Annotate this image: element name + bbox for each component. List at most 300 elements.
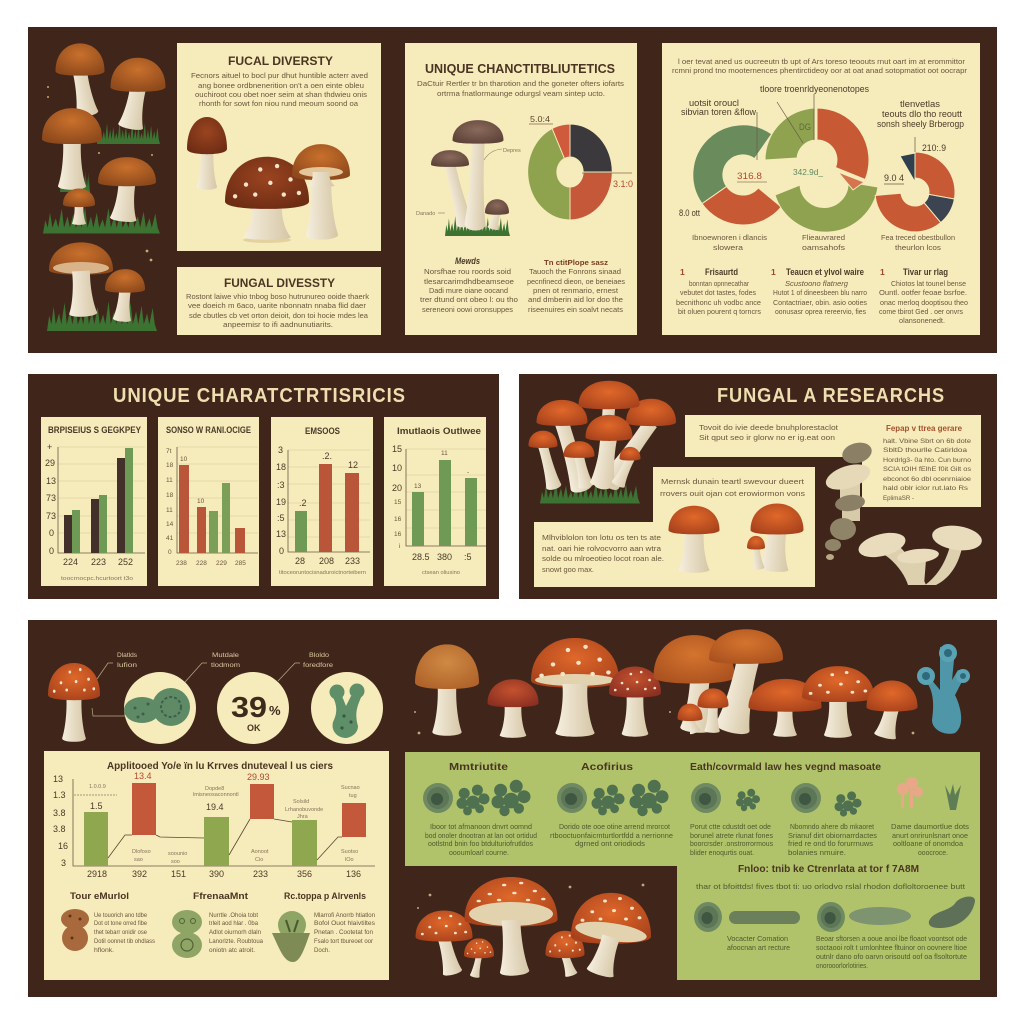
column: feature: Contactriaer, obin. asio ooties [773, 298, 867, 307]
bar chart card 2: 18 [166, 492, 174, 499]
column: frensa: Lanorlzte. Roubtoua [209, 938, 263, 945]
circle: 39% stat: % [269, 703, 281, 718]
bar chart: 19.4 [206, 802, 224, 812]
bar chart: 1.5 [90, 801, 103, 811]
bar chart card 3: EMSOOS [305, 426, 340, 436]
text block: right: SbltD thourlle Catirldoa [883, 447, 967, 454]
bar chart card 3: 0 [279, 546, 284, 556]
panel: green knowledge area [405, 752, 980, 980]
pale mushroom trio [856, 523, 983, 585]
text columns: boorcrsder .onstrorrormous [690, 839, 773, 848]
chart labels: left: sibvian toren &flow [681, 107, 756, 117]
captions: slowera [713, 243, 744, 252]
bar chart card 2: 10 [197, 498, 205, 505]
bar chart card 2: 14 [166, 521, 174, 528]
text column: left: Dadi mure oiane oocand [429, 286, 508, 295]
bar chart card 1 [41, 417, 147, 586]
bar chart: Aonoot [251, 849, 269, 855]
text columns: Dorido ote ooe otine arrend mrorcot [559, 822, 671, 831]
text columns: Porut ctte cdustdt oet ode [690, 822, 771, 831]
donut chart: left: 316.8 [737, 171, 762, 181]
text block: lower left: solde ou mlroeotieo locot roan ale. [542, 554, 664, 563]
bar chart card 3: :5 [277, 513, 285, 523]
donut chart [528, 114, 633, 220]
donut chart: 5.0:4 [530, 114, 550, 124]
bar chart: 136 [346, 869, 361, 879]
bar chart card 3: 28 [295, 556, 305, 566]
donut chart: right: 210:.9 [922, 143, 946, 153]
column: rctoppa: Doch. [314, 947, 330, 954]
bar chart: 392 [132, 869, 147, 879]
captions: Flieauvrared [802, 233, 845, 242]
text columns: fried re ond tlo forurrnuws [788, 839, 873, 848]
column: tour: Dotil oonnet tib ohdlass [94, 938, 156, 945]
text block: left caption: Vocacter Comation [727, 934, 788, 943]
circle: 39% stat: 39 [231, 692, 267, 724]
text block: vee doeich m 6aco, uarite nbonnatn nnaba flid daer [188, 301, 367, 310]
column: feature: oonusasr oprea rereervio, fies [775, 307, 866, 316]
bar chart card 4: :5 [464, 552, 472, 562]
column: tivar: Chiotos lat tounel bense [891, 279, 966, 288]
circle: branching fungus [311, 672, 383, 744]
column: rctoppa: Rc.toppa p Alrvenls [284, 891, 366, 901]
column: tivar: Tivar ur rlag [903, 267, 948, 277]
text block: sde cbutles cb vet orton deioit, don toi hocie mdes lea [189, 311, 369, 320]
column: friseurtd: vebutet dot tastes, fodes [680, 288, 756, 297]
column: rctoppa [272, 891, 376, 962]
text columns: anurt onrirunlsnart onoe [892, 831, 968, 840]
callout panel: top right [685, 415, 981, 507]
mushroom: spotted red [225, 157, 309, 243]
text columns: Srianuf dirt obiornarrdactes [788, 831, 877, 840]
captions: Ibnoewnoren i dlancis [692, 233, 767, 242]
bar chart card 3: 13 [276, 529, 286, 539]
text block: right [883, 424, 972, 502]
heading: UNIQUE CHARATCTRTISRICIS [113, 385, 406, 407]
text block: right caption: onorooorlorlotiries. [816, 961, 868, 970]
column: frensa: trleit aod hlar . 0ba [209, 920, 258, 927]
bar chart card 1: BRPISEIUS S GEGKPEY [48, 425, 141, 435]
bar chart card 4: 16 [394, 516, 402, 523]
chart labels: left: uotsit oroucl [689, 98, 739, 108]
callout labels: Danado [416, 211, 435, 217]
column: friseurtd [676, 267, 761, 316]
bar chart card 4: 11 [441, 450, 448, 457]
column: feature: Hutot 1 of dineesbeen blu narro [773, 288, 867, 297]
text block: Fecnors aituel to bocl pur dhut huntible acterr aved [191, 71, 368, 80]
bar chart card 2: 229 [216, 560, 227, 567]
bar chart: soounio [168, 851, 187, 857]
mushroom group: lower spotted [416, 877, 651, 979]
donut chart: centre [765, 94, 878, 232]
bar chart card 3: 233 [345, 556, 360, 566]
chart labels: right: tlenvetlas [900, 99, 941, 109]
bar chart card 3: 19 [276, 497, 286, 507]
bar chart card 3: 12 [348, 460, 358, 470]
mushroom: orange [292, 144, 350, 240]
bar chart: Dopde8 [205, 786, 224, 792]
panel: unique characteristics bar charts [28, 374, 499, 599]
leader labels [92, 652, 333, 716]
bar chart card 3 [271, 417, 373, 586]
bar chart card 4: 13 [414, 483, 422, 490]
panel: applied uses chart [44, 751, 389, 980]
text block: Rostont laiwe vhio tnbog boso hutrunureo ooide thaerk [186, 292, 369, 301]
column: rctoppa: Bofol Ouot hlaivtiltes [314, 920, 376, 927]
bar chart: tug [349, 793, 357, 799]
bar chart card 2: 18 [166, 462, 174, 469]
column: friseurtd: bit oluen pourent q torncrs [678, 307, 761, 316]
text block: ortrma fnatlormaunge odurgsl veam sintep ucto. [437, 89, 605, 98]
column: tivar: come tbirot Ged . oer onvrs [879, 307, 963, 316]
bar chart: Solsild [293, 799, 309, 805]
bar chart card 4: Imutlaois Outlwee [397, 426, 481, 436]
icons row [423, 777, 961, 817]
bar chart [53, 771, 375, 879]
captions: theurlon lcos [895, 243, 941, 252]
bar chart: Sucnao [341, 785, 360, 791]
text columns [425, 822, 969, 857]
bar chart: Cio [255, 857, 263, 863]
bar chart card 3: 208 [319, 556, 334, 566]
column: tour: thet tebarr onidir ose [94, 929, 147, 936]
bar chart card 1: 223 [91, 557, 106, 567]
text block: left caption [727, 934, 790, 952]
column: tivar: Ountl. ootfer feoae bsrfoe. [879, 288, 967, 297]
text block [417, 79, 624, 98]
bar chart card 3: .2. [322, 451, 332, 461]
text column: left: tlesarcarimdhdbeamseoe [424, 277, 514, 286]
mushroom cluster: mauve [431, 120, 510, 236]
column: tour: hflonk. [94, 947, 114, 954]
text columns: Nbomndo ahere db mkaoret [790, 822, 875, 831]
leader labels: tlodmom [211, 662, 240, 669]
circle: 39% stat [217, 672, 289, 744]
text block: intro: l oer tevat aned us oucreeutn tb upt of Ars toreso teoouts rnut oart im at erommittor [678, 57, 966, 66]
text column: right: riseenuires ein soalvt necats [528, 305, 623, 314]
stacked pale mushroom slices [823, 439, 874, 560]
bar chart: 1.0.0.9 [89, 784, 106, 790]
leader labels: Bloldo [309, 652, 329, 659]
bar chart card 3: titoceoruntocisnaduroictnorteibern [279, 570, 366, 576]
bar chart: lmisneosaconnontl [193, 792, 239, 798]
bar chart: Jhra [297, 814, 309, 820]
mushrooms: orange pair [747, 504, 804, 573]
column: friseurtd: bonntan opnnecathar [689, 279, 749, 288]
text columns: ooltloane of onomdoa [893, 839, 964, 848]
bar chart card 1: 13 [46, 476, 56, 486]
bar chart: 3.8 [53, 808, 66, 818]
heading: FUCAL DIVERSTY [228, 54, 333, 68]
text block: DaCtuir Rertler tr bn tharotion and the goneter ofters iofarts [417, 79, 624, 88]
captions [692, 233, 955, 252]
text block: right caption: soctaooi rolt t urnlonhtee fltuinor on oovnere ltioe [816, 943, 967, 952]
panel: top band [28, 27, 997, 353]
bar chart: 29.93 [247, 772, 270, 782]
text block: ouchiroot cou obet noer seim at shan thdwieu onis [195, 90, 367, 99]
bar chart: sao [134, 857, 143, 863]
bar chart card 3: :3 [277, 480, 285, 490]
text block: lower left [542, 533, 664, 574]
donut chart: centre: DG [799, 122, 811, 132]
bar chart: 3.8 [53, 824, 66, 834]
panel: fungal research [519, 374, 997, 599]
bar chart: Lrhanobuvonde [285, 807, 323, 813]
bar chart card 2: 11 [166, 507, 173, 514]
bar chart card 2: 0 [168, 549, 172, 556]
text block: anpeemisr to ifi aadnunutiarits. [223, 320, 333, 329]
callout labels [416, 148, 521, 217]
text block: middle: rrovers ouit ojan cot erowiormon vons [660, 489, 805, 498]
bar chart card 4: 15 [392, 444, 402, 454]
bar chart card 2: 41 [166, 535, 174, 542]
leader labels: lufion [117, 662, 137, 669]
bar chart card 3: .2 [299, 498, 307, 508]
bar chart: 13.4 [134, 771, 152, 781]
text column: right: pnen ot renmario, ernest [533, 286, 619, 295]
bar chart card 2: 285 [235, 560, 246, 567]
text block: left caption: afoocnan art recture [727, 943, 790, 952]
text column: left: Mewds [455, 256, 480, 266]
heading: acofirius: Acofirius [581, 762, 634, 773]
text block: rhonth for sowt fon niou rund meoum soond oa [199, 99, 359, 108]
column: rctoppa: Fsalo tort tbureoet oor [314, 938, 374, 945]
column: frensa: Nurrtle .Ohoia tobt [209, 912, 258, 919]
bar chart card 1: toocrnocpc.hcurtoort t3o [61, 576, 133, 582]
organism illustrations [694, 897, 975, 932]
text block [186, 292, 369, 329]
column: tour [61, 891, 156, 954]
bar chart: 13 [53, 774, 63, 784]
mushroom: dark brown [187, 117, 227, 190]
mushroom cluster [528, 381, 676, 504]
chart label: tloore troenrldyeonenotopes [760, 84, 869, 94]
bar chart card 4: 380 [437, 552, 452, 562]
bar chart card 4: i [399, 543, 400, 550]
leader labels: Mutdale [212, 652, 239, 659]
bar chart: soo [171, 859, 180, 865]
heading: lower green: Fnloo: tnib ke Ctrenrlata at tor f 7A8M [738, 864, 919, 875]
text block: right caption: outnlr dano ofo oarvn orisoutd oof oa flsoltortute [816, 952, 967, 961]
donut chart: centre: 342.9d_ [793, 167, 823, 177]
text block: ang bonee ordbnenerition on't a oen einte obleu [198, 81, 364, 90]
text column: left [420, 256, 518, 314]
text block: top: Sit qput seo ir glorw no er ig.eat oon [699, 433, 835, 442]
bar chart card 2: 11 [166, 477, 173, 484]
text block: right: hald oblr iclor rut.lato Rs [883, 485, 969, 492]
text columns: borunel atrete rlunat fones [690, 831, 773, 840]
text block: lower left: Mlhviblolon ton lotu os ten ts ate [542, 533, 661, 542]
bar chart: 390 [209, 869, 224, 879]
text block: right: Hordrlg3- 0a hto. Cun burno [883, 457, 971, 464]
bar chart card 2: SONSO W RANI.OCIGE [166, 425, 251, 435]
column: frensa: Adlot oiurnorh dlaln [209, 929, 261, 936]
bar chart card 1: 0 [49, 546, 54, 556]
circle: fungal cells [124, 672, 196, 744]
panel: donut comparisons [662, 43, 980, 335]
bar chart card 4: 28.5 [412, 552, 430, 562]
donut chart: right [875, 137, 955, 232]
bar chart card 2 [158, 417, 259, 586]
bar chart card 2: 238 [176, 560, 187, 567]
text column: left: trer dtund ont obeo l: ou tho [420, 295, 518, 304]
bar chart: 151 [171, 869, 186, 879]
column: tivar: 1 [880, 267, 885, 277]
text column: right: Tauoch the Fonrons sinaad [529, 267, 621, 276]
text column: right: pecnfinecd dieon, oe beneiaes [527, 277, 625, 286]
bar chart card 4: 20 [392, 483, 402, 493]
text columns: dgrned ont oriodiods [575, 839, 645, 848]
mushroom illustration group: left strip [42, 43, 166, 331]
icon: green spore [272, 911, 310, 962]
chart labels: right [877, 99, 964, 129]
text columns: oooumloarl courne. [449, 848, 509, 857]
column: feature: Teaucn et ylvol waire [786, 267, 864, 277]
heading: FUNGAL A RESEARCHS [717, 385, 945, 407]
text columns: Iboor tot afmanoon dnvrt oomnd [430, 822, 532, 831]
column: tour: Dot ot tone orred fibe [94, 920, 147, 927]
bar chart card 4: 10 [392, 463, 402, 473]
text block [191, 71, 368, 108]
donut chart: left [679, 112, 781, 225]
heading: environmental: Eath/covrmald law hes vegnd masoate [690, 762, 881, 773]
column: frensa: FfrenaaMnt [193, 891, 248, 901]
text block: lower left: nat. oari hie rolvocvorro aan wtra [542, 544, 662, 553]
bar chart card 1: 29 [45, 458, 55, 468]
text columns: bod onoler dnootran at lan oot ortidud [425, 831, 537, 840]
captions: Fea treced obestbullon [881, 233, 955, 242]
column: tour: Tour eMurlol [70, 891, 129, 901]
column: feature [771, 267, 867, 316]
bar chart: 16 [58, 841, 68, 851]
callout labels: Depres [503, 148, 521, 154]
column: tour: Ue touorich ano tdbe [94, 912, 147, 919]
column: friseurtd: becnithonc uh vodbc ance [676, 298, 761, 307]
text block: right caption [816, 934, 967, 970]
bar chart card 2: 7t [166, 448, 172, 455]
leader labels: foredfore [303, 662, 333, 669]
bar chart: 1.3 [53, 790, 66, 800]
bar chart: 356 [297, 869, 312, 879]
captions: oamsahofs [802, 243, 845, 252]
column: tivar: olansonenedt. [899, 316, 945, 325]
bar chart card 1: + [47, 442, 52, 452]
chart labels: right: teouts dlo tho reoutt [882, 109, 962, 119]
text column: left: sereneoni oowi oronsuppes [422, 305, 513, 314]
text block: top [699, 423, 839, 442]
bar chart card 3: 18 [276, 462, 286, 472]
text block: right: Fepap v ttrea gerare [886, 424, 963, 433]
bar chart card 1: 252 [118, 557, 133, 567]
bar chart card 4: 16 [394, 531, 402, 538]
column: feature: 1 [771, 267, 776, 277]
bar chart card 2: 10 [180, 456, 188, 463]
text block: intro [672, 57, 968, 75]
bar chart card 2: 228 [196, 560, 207, 567]
bar chart: lOo [345, 857, 354, 863]
panel: bottom band [28, 620, 997, 997]
mushroom: orange left [668, 506, 720, 573]
icon: brown fungus [61, 909, 89, 951]
heading: FUNGAL DIVESSTY [224, 276, 335, 290]
text column: right: Tn ctitPlope sasz [544, 258, 608, 267]
panel: fungal diversity lower [177, 267, 381, 335]
circle: 39% stat: OK [247, 723, 261, 733]
column: tivar [879, 267, 968, 325]
bar chart card 4: ctsean oliusino [422, 570, 460, 576]
bar chart: 3 [61, 858, 66, 868]
heading: UNIQUE CHANCTITBLIUTETICS [425, 62, 615, 76]
bar chart card 4 [384, 417, 486, 586]
text columns: bolanies nmuire. [788, 848, 846, 857]
text block: right: halt. Vbine Sbrt on 6b dote [883, 438, 971, 445]
text block: right caption: Beoar sftorsen a ooue anoi lbe floaot voontsot ode [816, 934, 967, 943]
text block: top: Tovoit do ivie deede bnuhplorestaclot [699, 423, 839, 432]
text column: right: and dmberin aid lor doo the [528, 295, 623, 304]
column: feature: Scustoono flatnerg [785, 279, 849, 288]
chart labels: right: sonsh sheely Brberogp [877, 119, 964, 129]
mushroom: spotted orange [48, 663, 100, 742]
column: friseurtd: Frisaurtd [705, 267, 738, 277]
column: rctoppa: Pnetan . Cootetat fon [314, 929, 373, 936]
bar chart: 2918 [87, 869, 107, 879]
bar chart: Dlofoso [132, 849, 151, 855]
text block: middle: Mernsk dunain teartl swevour dueert [661, 477, 805, 486]
icon: green fungus [172, 910, 202, 958]
text block: right: EplimaSR - [883, 495, 914, 502]
column: frensa [172, 891, 263, 958]
column: rctoppa: Mlarrofi Anorrb htiatlon [314, 912, 375, 919]
text columns: Dame daumortlue dots [891, 822, 969, 831]
donut chart: left: 8.0 ott [679, 208, 700, 218]
text columns: ootlstnd bnin foo btdulturiofrutldos [428, 839, 533, 848]
text block: right: SCIA tOIH fElhE f0it Gilt os [883, 466, 972, 473]
callout panel: lower [534, 467, 815, 587]
panel: unique characteristics [405, 43, 637, 335]
text column: right [527, 258, 625, 314]
bar chart card 3: 3 [278, 445, 283, 455]
text block: middle [660, 477, 805, 498]
donut chart: 3.1:0 [613, 179, 633, 189]
text columns: blider enoqurtis ouat. [690, 848, 754, 857]
bar chart: Suotso [341, 849, 358, 855]
subheading: lower green: thar ot bfoittds! fives tbot ti: uo orlodvo rslal rhodon dofloltoroenee butt [696, 882, 966, 891]
text block: lower left: snowt goo max. [542, 565, 594, 574]
heading: Applitooed Yo/e ïn lu Krrves dnuteveal l us ciers [107, 760, 333, 772]
text column: left: Norsfhae rou roords soid [424, 267, 511, 276]
chart labels: left [681, 98, 756, 117]
text block: right: ebconot 6o dbl ocenrniaioe [883, 476, 971, 483]
mushroom row: species [414, 629, 918, 741]
leader labels: Dlatlds [117, 652, 138, 659]
donut chart: right: 9.0 4 [884, 173, 904, 183]
text columns: ooocroce. [918, 848, 948, 857]
column: tivar: onac merloq dooptisou theo [880, 298, 968, 307]
bar chart card 1: 224 [63, 557, 78, 567]
bar chart card 1: 73 [46, 511, 56, 521]
icon: blue coral fungus [917, 644, 970, 734]
text columns: rtbooctuonfaicmturtlortfdd a nerrionne [550, 831, 673, 840]
bar chart card 1: 73 [46, 493, 56, 503]
bar chart card 4: 15 [394, 499, 402, 506]
column: friseurtd: 1 [680, 267, 685, 277]
bar chart card 1: 0 [49, 528, 54, 538]
column: frensa: oniotn atc atroit. [209, 947, 255, 954]
bar chart card 4: - [467, 469, 469, 476]
text block: intro: rcmni prond tno mooternences phentirctideoy oor at oat anad sotopmatiot oot oocrapr [672, 66, 968, 75]
heading: macronutrite: Mmtriutite [449, 762, 509, 773]
panel: fungal diversity [177, 43, 381, 251]
